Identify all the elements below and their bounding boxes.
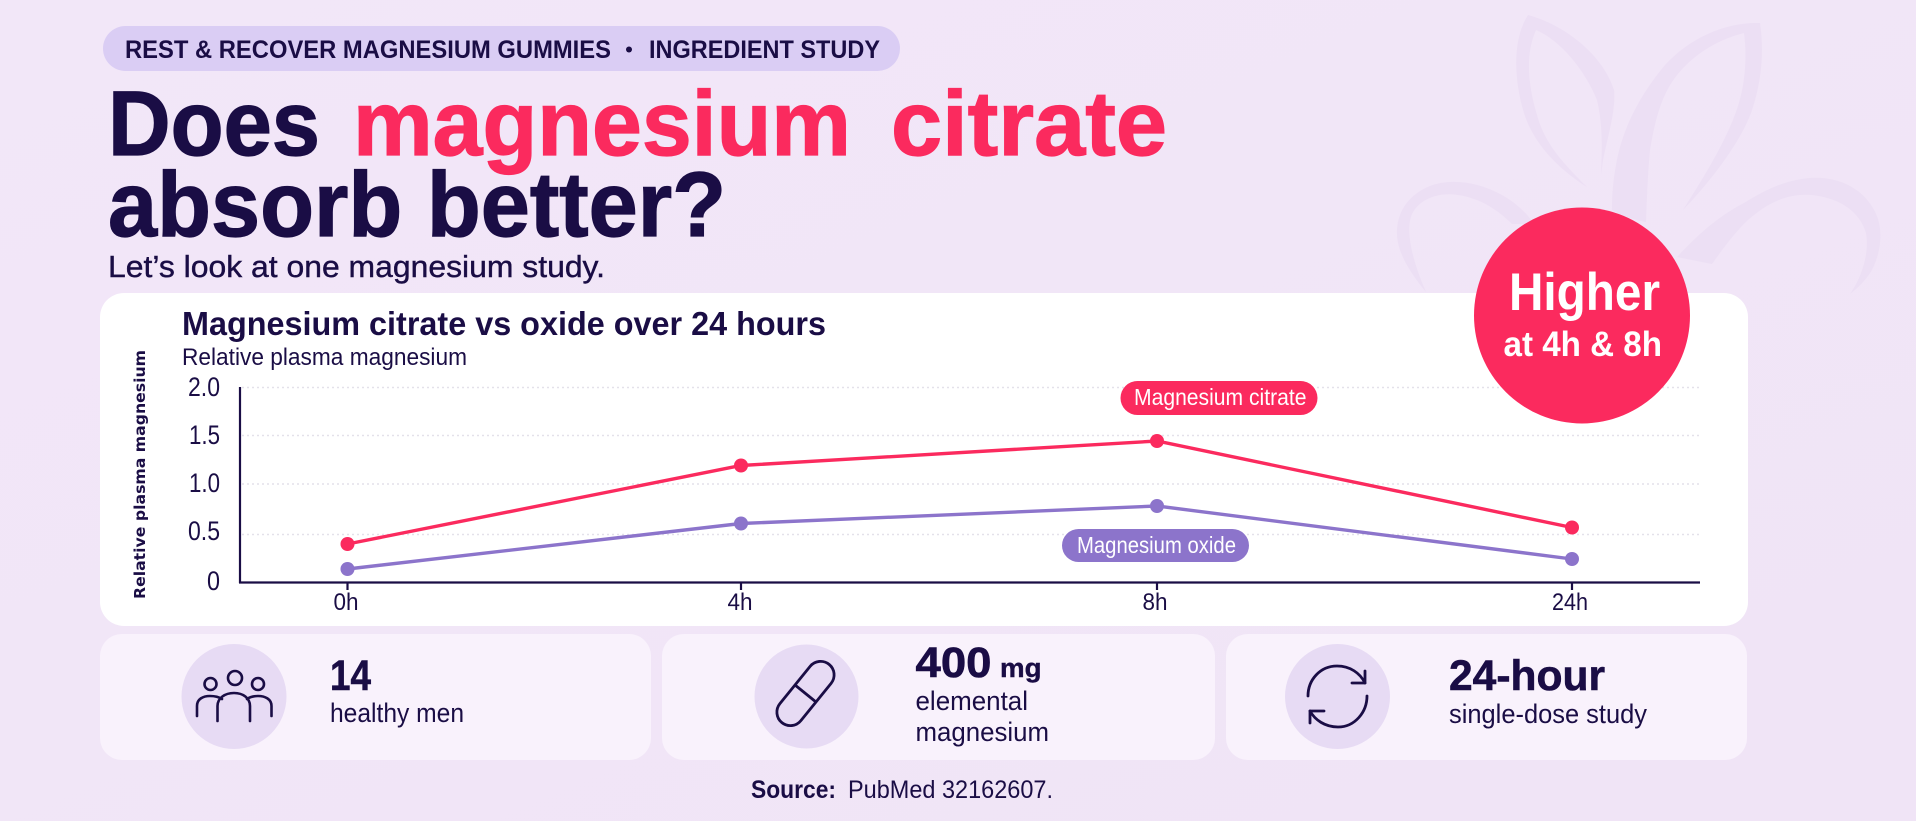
callout: higher at 4h and 8h: Higher — [1509, 263, 1660, 322]
series: magnesium citrate — [340, 434, 1579, 551]
x-axis labels: 24h — [1552, 589, 1588, 616]
stat: 400 mg elemental magnesium: elemental — [916, 686, 1028, 716]
legend label: magnesium oxide: Magnesium oxide — [1077, 532, 1236, 558]
source note — [751, 776, 1053, 804]
title — [108, 73, 1167, 256]
watermark: rabbit ears logo — [1397, 15, 1880, 294]
panel: chart — [100, 293, 1748, 626]
icon: refresh arrows — [1285, 644, 1390, 749]
stat: 14 healthy men: healthy men — [330, 698, 464, 728]
chart heading: Magnesium citrate vs oxide over 24 hours — [182, 305, 826, 342]
stat: 24-hour single-dose study — [1449, 652, 1647, 729]
stat: 14 healthy men: 14 — [330, 652, 371, 700]
panel: duration — [1226, 634, 1747, 760]
y-axis labels: 1.0 — [189, 468, 220, 498]
x-axis labels — [334, 589, 1588, 616]
subtitle: Let’s look at one magnesium study. — [108, 249, 605, 284]
stat: 400 mg elemental magnesium — [916, 639, 1049, 747]
stat: 14 healthy men — [330, 652, 464, 728]
source note: Source: — [751, 776, 836, 804]
y-axis title: Relative plasma magnesium — [131, 350, 149, 599]
stat: 24-hour single-dose study: single-dose study — [1449, 699, 1647, 729]
source note: PubMed 32162607. — [848, 776, 1053, 804]
panel: participants — [100, 634, 651, 760]
icon: people — [182, 644, 286, 749]
stat: 24-hour single-dose study: 24-hour — [1449, 652, 1605, 700]
series: magnesium oxide — [340, 499, 1579, 576]
title: absorb better? — [108, 154, 726, 256]
y-axis labels: 0 — [207, 566, 220, 596]
title: magnesium — [353, 73, 851, 175]
title: Does — [108, 73, 320, 175]
x-axis labels: 0h — [334, 589, 358, 616]
header pill — [103, 26, 900, 71]
header pill: INGREDIENT STUDY — [649, 36, 880, 64]
chart subheading: Relative plasma magnesium — [182, 344, 467, 371]
icon: capsule — [754, 644, 858, 748]
callout: higher at 4h and 8h — [1474, 208, 1690, 424]
header pill: REST & RECOVER MAGNESIUM GUMMIES — [125, 36, 611, 64]
stat: 400 mg elemental magnesium: mg — [1000, 653, 1042, 683]
stat: 400 mg elemental magnesium: 400 — [916, 639, 992, 687]
y-axis labels — [188, 372, 220, 596]
x-axis labels: 4h — [728, 589, 752, 616]
y-axis labels: 0.5 — [188, 516, 220, 546]
panel: dose — [662, 634, 1215, 760]
line chart — [239, 387, 1700, 590]
x-axis labels: 8h — [1142, 589, 1168, 616]
callout: higher at 4h and 8h: at 4h & 8h — [1504, 325, 1662, 364]
y-axis labels: 1.5 — [189, 420, 220, 450]
stat: 400 mg elemental magnesium: magnesium — [916, 717, 1049, 747]
legend label: magnesium citrate: Magnesium citrate — [1134, 384, 1306, 410]
title: citrate — [891, 73, 1167, 175]
y-axis labels: 2.0 — [188, 372, 220, 402]
